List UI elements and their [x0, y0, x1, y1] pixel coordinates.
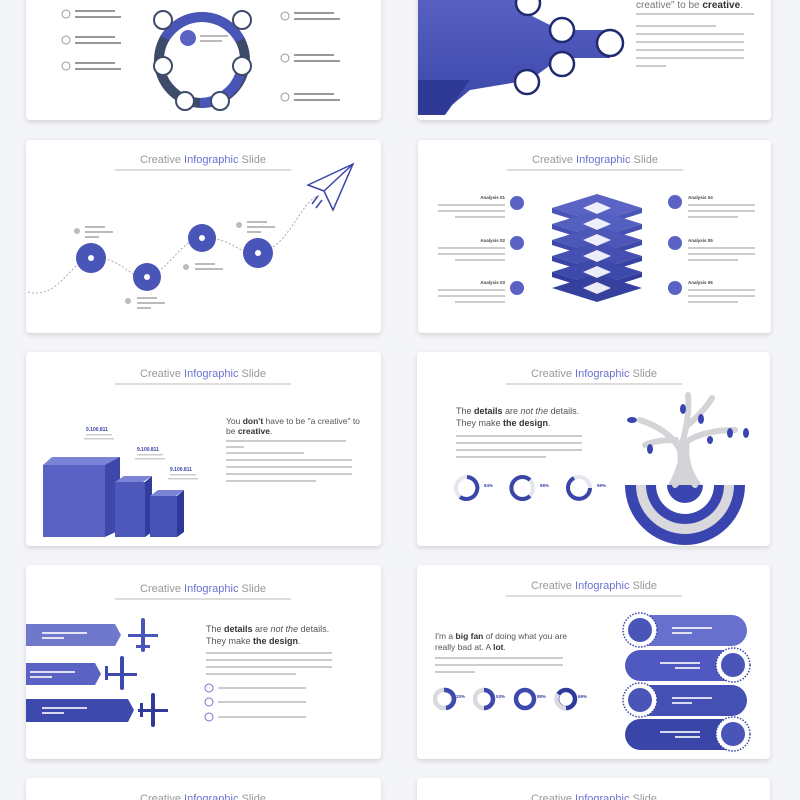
card: arrows shape	[418, 0, 771, 120]
analysis labels: Analysis 05	[688, 238, 713, 243]
card: pills: 69%	[578, 694, 587, 699]
icon: paper plane	[308, 164, 353, 210]
heading text: creative" to be creative.	[636, 0, 743, 11]
card: cycle diagram	[26, 0, 381, 120]
card: tree	[417, 352, 770, 546]
banners	[26, 624, 121, 646]
card: planes: Creative Infographic Slide	[140, 583, 266, 595]
card: paper plane path	[26, 140, 381, 333]
labels	[74, 221, 275, 309]
card: pills: 53%	[496, 694, 505, 699]
icon list right	[281, 12, 340, 101]
boxes	[43, 457, 184, 537]
card: tree: 68%	[540, 483, 549, 488]
stack	[552, 194, 642, 302]
card: layered stack	[418, 140, 771, 333]
card: tree: 84%	[484, 483, 493, 488]
circles	[515, 0, 623, 94]
analysis labels: Analysis 06	[688, 280, 713, 285]
value labels: 9.100.811	[137, 447, 159, 453]
card: pills	[417, 565, 770, 759]
heading: The details are not the details.	[206, 624, 329, 634]
card: 3D bars: be creative.	[226, 426, 272, 436]
card: 3D bars: Creative Infographic Slide	[140, 368, 266, 380]
card: pills: 88%	[537, 694, 546, 699]
card: pills: really bad at. A lot.	[435, 642, 506, 652]
card: 3D bars	[26, 352, 381, 546]
card: pills: Creative Infographic Slide	[531, 580, 657, 592]
tree graphic	[625, 395, 749, 545]
checklist	[205, 684, 213, 721]
value labels	[86, 427, 192, 473]
card: pills: 20%	[456, 694, 465, 699]
analysis labels: Analysis 03	[480, 280, 505, 285]
card: tree: Creative Infographic Slide	[531, 368, 657, 380]
heading: The details are not the details.	[456, 406, 579, 416]
card: tree: They make the design.	[456, 418, 551, 428]
circles	[76, 224, 273, 291]
card: planes: They make the design.	[206, 636, 301, 646]
blue shape	[418, 0, 610, 115]
value labels: 9.100.811	[170, 467, 192, 473]
analysis labels: Analysis 02	[480, 238, 505, 243]
card: planes	[26, 565, 381, 759]
title: Creative Infographic Slide	[140, 154, 266, 166]
donuts	[456, 477, 590, 499]
card: bottom left partial	[26, 778, 381, 800]
heading: I'm a big fan of doing what you are	[435, 631, 567, 641]
card: tree: 59%	[597, 483, 606, 488]
analysis labels	[480, 195, 713, 285]
value labels: 9.100.811	[86, 427, 108, 433]
icon list left	[62, 10, 121, 70]
analysis labels: Analysis 04	[688, 195, 713, 200]
pills	[623, 613, 750, 751]
donuts	[435, 690, 575, 708]
heading: You don't have to be "a creative" to	[226, 416, 360, 426]
analysis labels: Analysis 01	[480, 195, 505, 200]
card: layered stack: Creative Infographic Slide	[532, 154, 658, 166]
card: bottom right partial	[417, 778, 770, 800]
ring	[154, 11, 251, 110]
dotted path	[28, 195, 320, 293]
icon: planes	[128, 618, 158, 652]
